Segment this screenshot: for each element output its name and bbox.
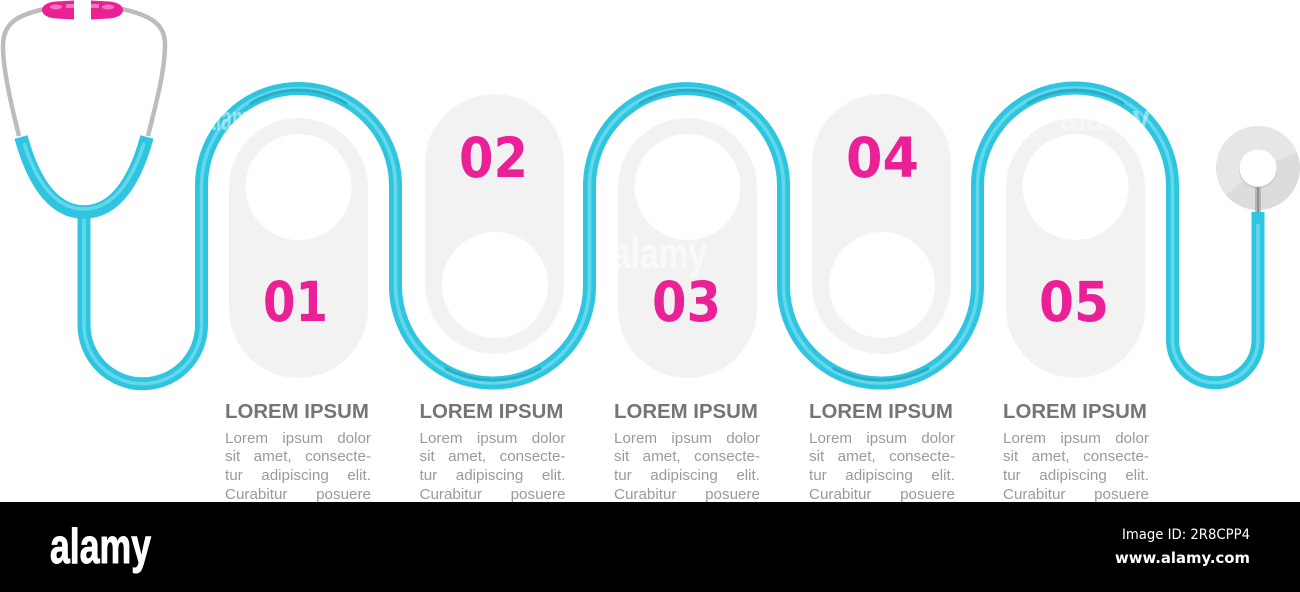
- number 01: 01: [263, 270, 328, 334]
- text block: step 2: LOREM IPSUM: [420, 401, 563, 423]
- text block: step 4: tur adipiscing elit.: [809, 467, 955, 484]
- number 03: 03: [652, 270, 721, 334]
- text block: step 2: tur adipiscing elit.: [420, 467, 566, 484]
- footer bar: [0, 502, 1300, 592]
- text block: step 1: sit amet, consecte-: [225, 448, 371, 465]
- text block: step 5: LOREM IPSUM: [1003, 401, 1147, 423]
- text block: step 4: Lorem ipsum dolor: [809, 430, 955, 446]
- watermark band on first tube arc: alamy: [205, 100, 260, 138]
- text block: step 3: [614, 401, 760, 502]
- stethoscope gray ear tubes: [3, 9, 165, 136]
- panel: step 5 pill: [1006, 118, 1145, 378]
- text block: step 5: [1003, 401, 1149, 502]
- number 05: 05: [1039, 270, 1109, 334]
- text block: step 4: sit amet, consecte-: [809, 448, 955, 465]
- stethoscope chest piece: [1216, 126, 1300, 213]
- watermark band on last tube arc: alamy: [1060, 97, 1150, 138]
- number 04: 04: [846, 126, 919, 190]
- stethoscope ear tips: [42, 0, 123, 20]
- text block: step 2: Lorem ipsum dolor: [420, 430, 566, 446]
- alamy logo: alamy: [50, 520, 151, 574]
- panel: step 4 pill: [812, 94, 951, 354]
- panel: step 2 pill: [425, 94, 564, 354]
- website: www.alamy.com: [1115, 549, 1250, 567]
- text block: step 2: sit amet, consecte-: [420, 448, 566, 465]
- text block: step 5: tur adipiscing elit.: [1003, 467, 1149, 484]
- text block: step 4: [809, 401, 955, 502]
- image id: Image ID: 2R8CPP4: [1122, 527, 1250, 543]
- text block: step 4: LOREM IPSUM: [809, 401, 953, 423]
- text block: step 1: tur adipiscing elit.: [225, 467, 371, 484]
- text block: step 3: sit amet, consecte-: [614, 448, 760, 465]
- text block: step 1: LOREM IPSUM: [225, 401, 369, 423]
- panel: step 1 pill: [229, 118, 368, 378]
- text block: step 5: sit amet, consecte-: [1003, 448, 1149, 465]
- text block: step 3: Lorem ipsum dolor: [614, 430, 760, 446]
- number 02: 02: [459, 126, 528, 190]
- text block: step 5: Lorem ipsum dolor: [1003, 430, 1149, 446]
- text block: step 1: Lorem ipsum dolor: [225, 430, 371, 446]
- stethoscope tube: [21, 88, 1258, 384]
- watermark in center: alamy: [612, 229, 707, 278]
- text block: step 3: LOREM IPSUM: [614, 401, 758, 423]
- text block: step 3: tur adipiscing elit.: [614, 467, 760, 484]
- panel: step 3 pill: [618, 118, 757, 378]
- text block: step 2: [420, 401, 566, 502]
- text block: step 1: [225, 401, 371, 502]
